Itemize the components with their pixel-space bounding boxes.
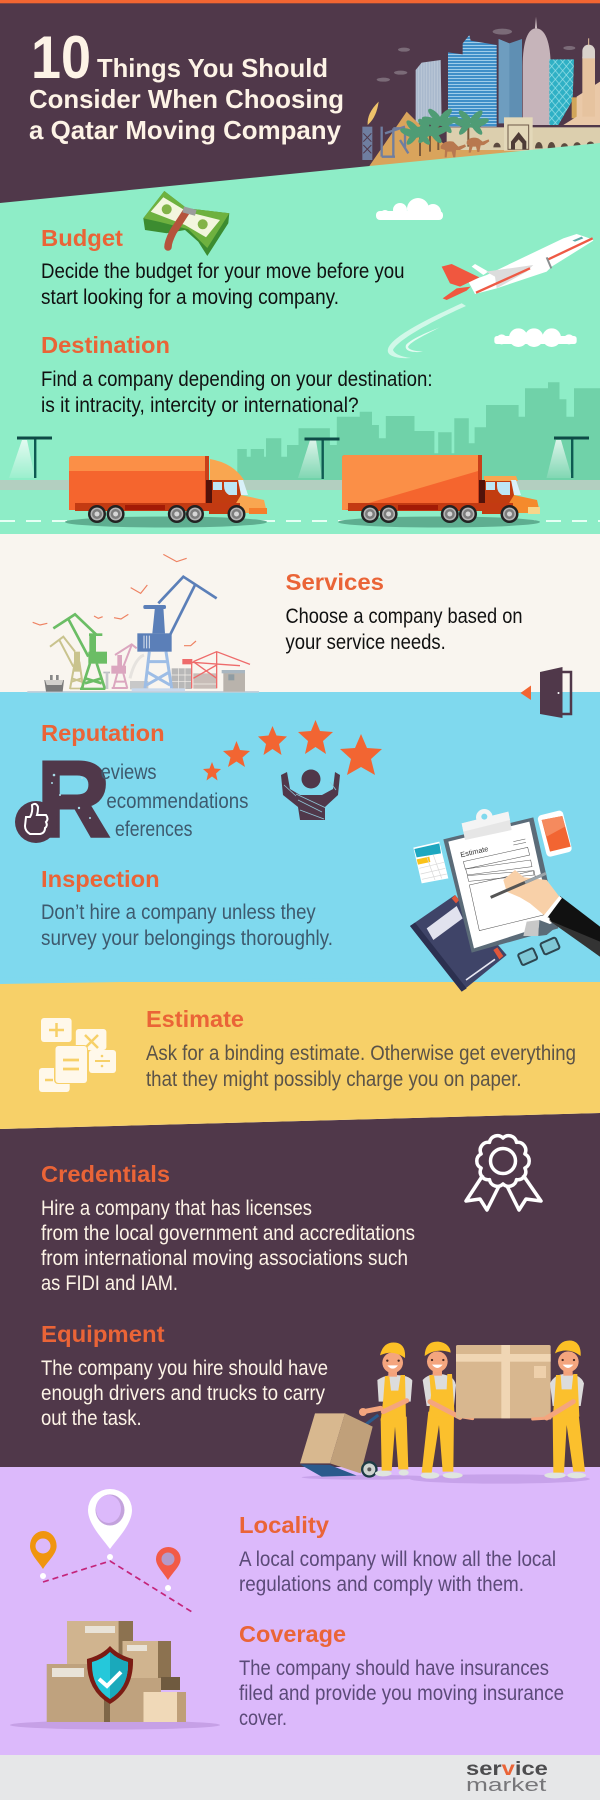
heading: destination: Destination <box>41 332 170 358</box>
text: coverage: The company should have insurances <box>239 1657 549 1680</box>
big letter R with thumb badge: R <box>37 738 110 859</box>
text: services <box>286 605 522 654</box>
text: estimate <box>146 1042 576 1091</box>
text: inspection: survey your belongings thoroughly. <box>41 927 333 950</box>
illustration: estimate clipboard on desk <box>410 809 600 992</box>
icon: calculation cards <box>39 1018 116 1092</box>
text: locality: regulations and comply with them. <box>239 1573 524 1596</box>
heading: credentials: Credentials <box>41 1161 170 1187</box>
text: coverage <box>239 1657 564 1730</box>
text: reviews, recommendations, references: ecommendations <box>106 790 248 813</box>
text: destination: is it intracity, intercity or international? <box>41 394 359 417</box>
icon: cloud left <box>376 198 443 220</box>
panel: footer <box>0 1750 600 1800</box>
text: inspection: Don’t hire a company unless they <box>41 901 316 924</box>
heading: coverage: Coverage <box>239 1621 346 1647</box>
title: Things You Should <box>97 53 328 83</box>
text: credentials: Hire a company that has licenses <box>41 1197 312 1220</box>
text: credentials: from the local government and accreditations <box>41 1222 415 1245</box>
illustration: port cranes <box>27 554 259 693</box>
text: reviews, recommendations, references: eviews <box>101 761 157 784</box>
title: 10 <box>31 24 91 91</box>
text: equipment: enough drivers and trucks to carry <box>41 1382 325 1405</box>
text: destination: Find a company depending on your destination: <box>41 368 432 391</box>
text: equipment: out the task. <box>41 1407 142 1430</box>
title: a Qatar Moving Company <box>29 115 342 145</box>
panel: credentials and equipment <box>0 1113 600 1484</box>
logo: service market <box>466 1758 548 1795</box>
icon: cloud right <box>494 328 577 347</box>
illustration: airplane <box>442 234 593 300</box>
illustration: estimate clipboard on desk: Estimate <box>459 844 489 859</box>
title <box>29 24 344 145</box>
icon: cheering person <box>281 770 340 820</box>
icon: door with arrow <box>520 667 571 718</box>
panel: locality and coverage <box>0 1467 600 1755</box>
icon: boxes with shield <box>10 1621 220 1730</box>
icon: money with belt <box>143 191 229 256</box>
text: budget <box>41 260 404 309</box>
text: credentials <box>41 1197 415 1295</box>
heading: services: Services <box>286 569 384 595</box>
icon: location pins with dashed route <box>30 1489 192 1612</box>
logo: service market: service <box>466 1758 548 1779</box>
text: inspection <box>41 901 333 950</box>
text: coverage: filed and provide you moving insurance <box>239 1682 564 1705</box>
text: budget: start looking for a moving company. <box>41 286 339 309</box>
text: services: Choose a company based on <box>286 605 522 628</box>
text: credentials: from international moving associations such <box>41 1247 408 1270</box>
text: reviews, recommendations, references <box>101 761 248 841</box>
text: budget: Decide the budget for your move before you <box>41 260 404 283</box>
illustration: orange truck right <box>338 455 540 528</box>
panel: budget and destination <box>0 143 600 534</box>
illustration: Doha skyline <box>350 17 600 180</box>
text: reviews, recommendations, references: eferences <box>115 818 192 841</box>
heading: equipment: Equipment <box>41 1321 165 1347</box>
heading: inspection: Inspection <box>41 866 160 892</box>
heading: reputation: Reputation <box>41 720 165 746</box>
illustration: movers with boxes <box>300 1341 590 1484</box>
heading: locality: Locality <box>239 1512 329 1538</box>
icon: airplane trail <box>388 303 466 358</box>
text: locality <box>239 1548 556 1596</box>
text: equipment <box>41 1357 328 1430</box>
logo: service market: market <box>466 1775 547 1795</box>
illustration: orange truck left <box>65 456 267 528</box>
text: destination <box>41 368 432 417</box>
heading: budget: Budget <box>41 225 123 251</box>
title: Consider When Choosing <box>29 84 344 114</box>
street lamps <box>9 436 589 479</box>
heading: estimate: Estimate <box>146 1006 244 1032</box>
panel: header <box>0 0 600 204</box>
panel: services <box>0 534 600 718</box>
text: services: your service needs. <box>286 631 446 654</box>
road <box>0 480 600 521</box>
text: locality: A local company will know all the local <box>239 1548 556 1571</box>
panel: reputation and inspection <box>0 692 600 992</box>
text: credentials: as FIDI and IAM. <box>41 1272 178 1295</box>
icon: award badge <box>466 1136 541 1210</box>
icon: rating stars <box>203 720 382 780</box>
text: equipment: The company you hire should have <box>41 1357 328 1380</box>
background city silhouette <box>237 382 600 480</box>
text: estimate: that they might possibly charge you on paper. <box>146 1068 522 1091</box>
panel: estimate <box>0 972 600 1129</box>
text: coverage: cover. <box>239 1707 287 1730</box>
